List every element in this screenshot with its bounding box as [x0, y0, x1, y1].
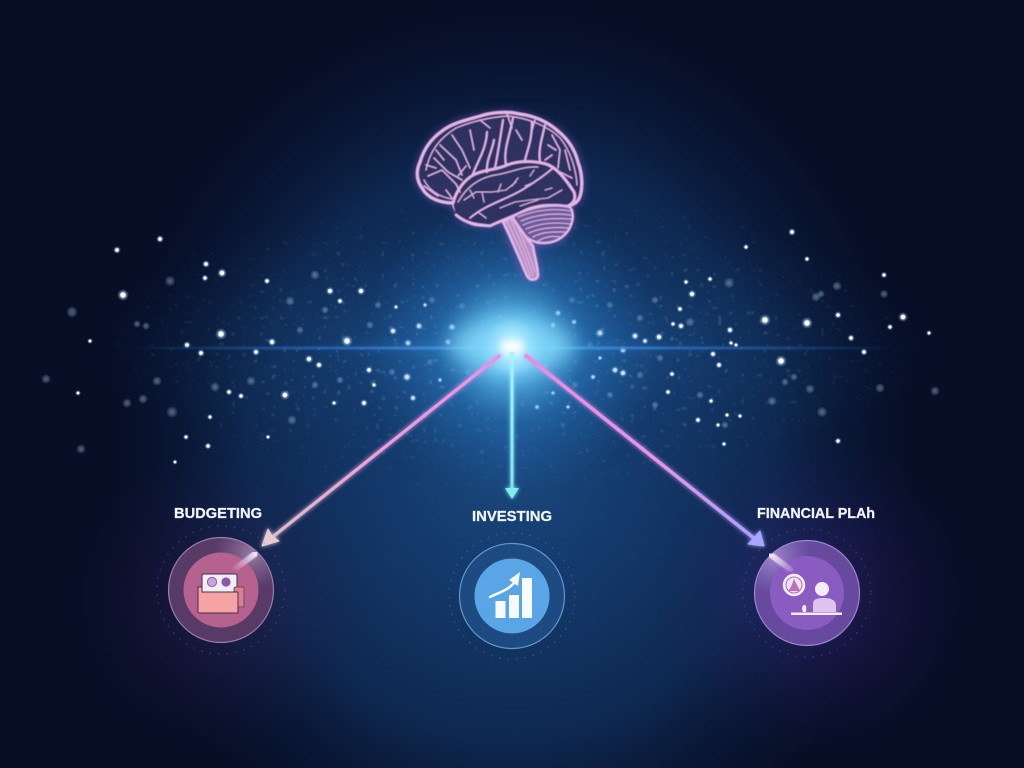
advisor figure [802, 582, 836, 612]
icon: financial plan advisor [743, 529, 871, 657]
inner disc [184, 552, 258, 628]
dotted halo [449, 533, 575, 659]
inner disc [770, 556, 844, 630]
dotted halo [157, 526, 285, 654]
star particle field [41, 228, 940, 465]
brain line art [417, 112, 582, 280]
brain stem [503, 217, 538, 280]
outer ring [754, 540, 860, 646]
bright stars left [75, 228, 932, 465]
ring highlight [169, 538, 273, 642]
central light burst [362, 197, 662, 497]
growth arrow [490, 572, 520, 597]
magnifier coin [784, 574, 804, 596]
horizontal light flare [120, 341, 904, 354]
dim bokeh particles [41, 270, 940, 454]
wallet body [198, 587, 244, 613]
brain glow [417, 113, 582, 278]
label: financial plan: FINANCIAL PLAh [757, 505, 875, 522]
chart bars [496, 578, 532, 618]
bright stars right [788, 228, 796, 236]
icon: budgeting wallet [157, 526, 285, 654]
arrow: to budgeting [262, 355, 500, 546]
dotted halo [743, 529, 871, 657]
arrow: to financial plan [525, 355, 764, 546]
cerebellum [512, 205, 573, 243]
brain outline icon [417, 112, 582, 280]
fine dust texture [147, 217, 887, 478]
desk line [791, 612, 842, 615]
outer ring [460, 544, 564, 648]
inner disc [474, 558, 550, 634]
ring highlight [755, 541, 859, 645]
label: investing: INVESTING [472, 508, 552, 525]
light streak [771, 555, 791, 570]
arrow: to investing [505, 352, 519, 499]
icon: investing chart [449, 533, 575, 659]
label: budgeting: BUDGETING [174, 505, 262, 522]
light streak [232, 554, 255, 571]
outer ring [168, 538, 274, 642]
card [202, 574, 237, 598]
